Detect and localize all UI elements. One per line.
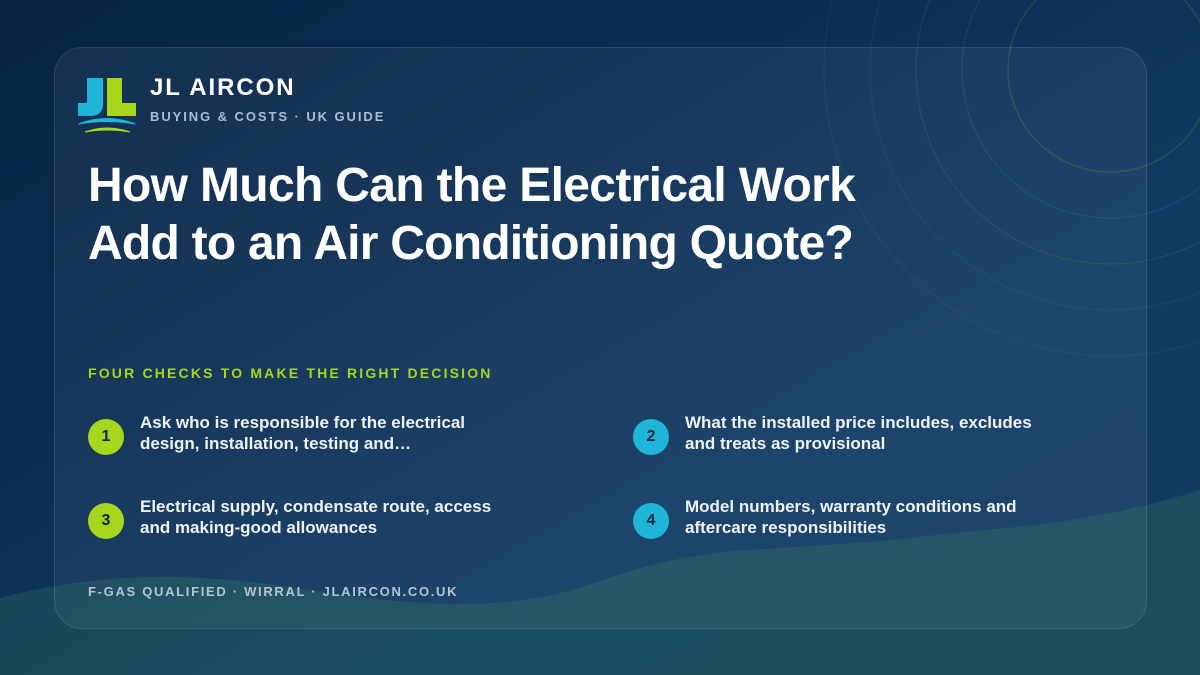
brand tagline: BUYING & COSTS · UK GUIDE (150, 109, 385, 124)
title: How Much Can the Electrical Work (88, 159, 855, 212)
check 3: 3 (102, 512, 110, 529)
title (88, 159, 856, 270)
check 4: 4 (647, 512, 655, 529)
panel: main card (54, 47, 1147, 629)
check 3: Electrical supply, condensate route, access (140, 497, 491, 516)
check 2: 2 (647, 428, 655, 445)
section heading: FOUR CHECKS TO MAKE THE RIGHT DECISION (88, 365, 493, 381)
title: Add to an Air Conditioning Quote? (88, 217, 853, 270)
check 3: and making-good allowances (140, 518, 377, 537)
check 1 (88, 413, 465, 455)
check 1: Ask who is responsible for the electrical (140, 413, 465, 432)
brand name: JL AIRCON (150, 74, 296, 101)
check 1: design, installation, testing and… (140, 434, 411, 453)
check 4: Model numbers, warranty conditions and (685, 497, 1017, 516)
check 2: What the installed price includes, excludes (685, 413, 1032, 432)
check 2 (633, 413, 1032, 455)
footer text: F-GAS QUALIFIED · WIRRAL · JLAIRCON.CO.UK (88, 584, 458, 599)
check 4: aftercare responsibilities (685, 518, 886, 537)
check 1: 1 (102, 428, 110, 445)
check 4 (633, 497, 1017, 539)
check 3 (88, 497, 491, 539)
check 2: and treats as provisional (685, 434, 885, 453)
icon: JL logo (78, 78, 136, 132)
